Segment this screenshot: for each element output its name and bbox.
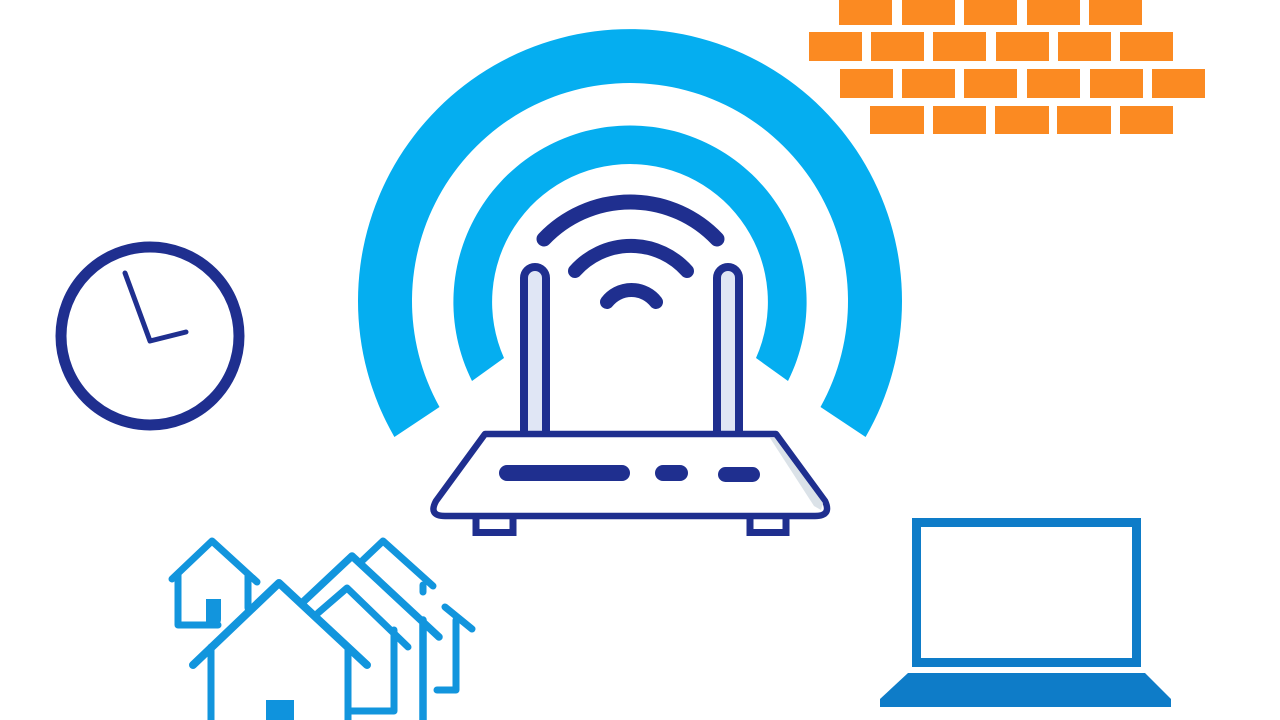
icon: clock	[61, 247, 239, 425]
icon: router	[433, 202, 827, 532]
router indicator lights	[499, 465, 760, 482]
laptop screen	[916, 522, 1136, 662]
second house	[318, 588, 408, 711]
third house	[303, 556, 439, 720]
icon: brick wall firewall	[809, 0, 1205, 134]
small house top left	[172, 541, 257, 625]
back house	[363, 541, 433, 592]
far right house fragment	[437, 607, 472, 690]
router antennas	[524, 267, 739, 432]
router wifi waves	[544, 202, 717, 302]
router body side shading	[770, 438, 823, 510]
laptop base	[880, 673, 1171, 707]
icon: outer and inner signal arcs	[358, 29, 902, 437]
router feet	[476, 514, 786, 532]
router body	[433, 434, 827, 516]
main house	[193, 583, 367, 720]
icon: laptop	[880, 522, 1171, 707]
icon: houses	[172, 541, 472, 720]
